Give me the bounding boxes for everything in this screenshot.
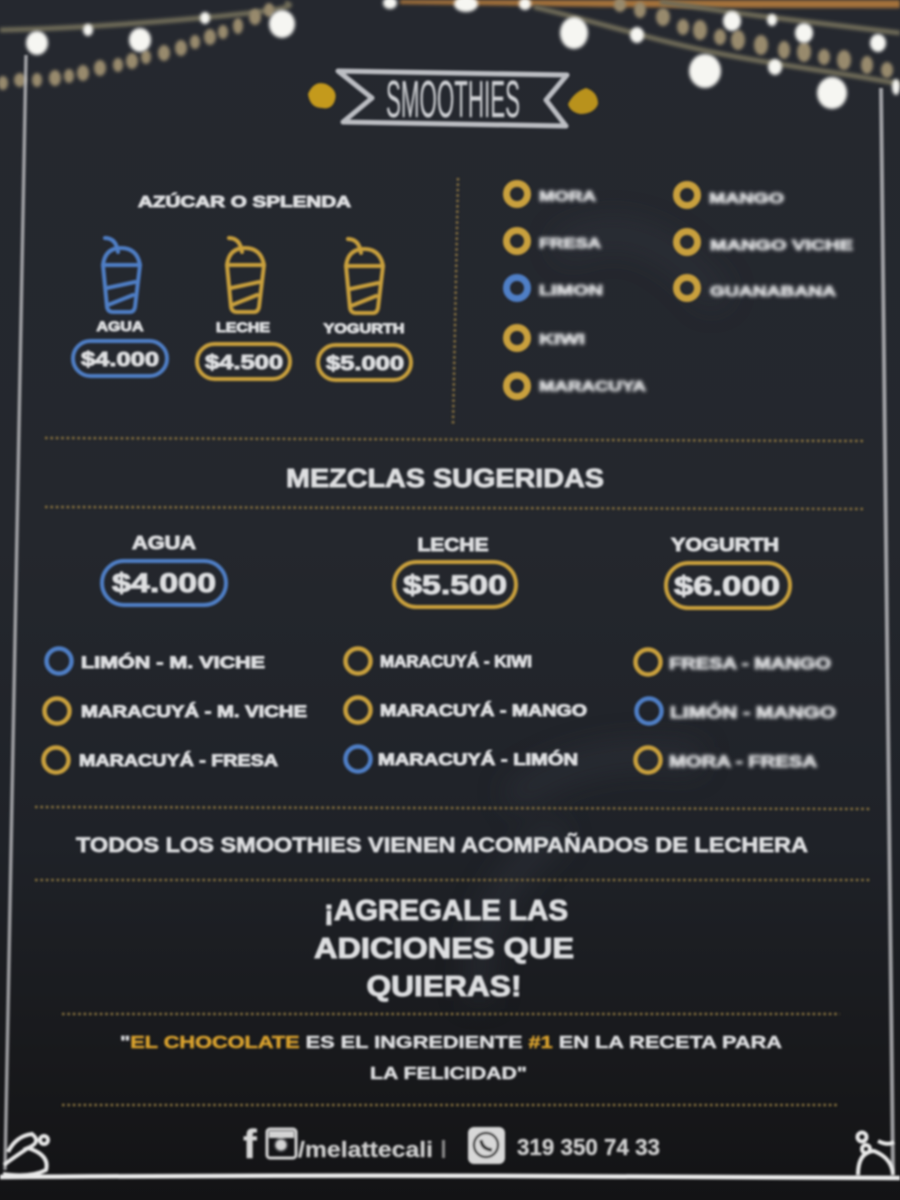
flavor: guanabana bbox=[676, 278, 836, 300]
icon: instagram bbox=[267, 1129, 296, 1158]
faint background swoosh bbox=[479, 233, 720, 1000]
price: leche bbox=[394, 562, 516, 607]
flavor: maracuya: MARACUYA bbox=[539, 378, 646, 395]
flavor: kiwi: KIWI bbox=[539, 331, 585, 348]
white bulbs bbox=[26, 0, 900, 109]
flavor: limon bbox=[506, 278, 603, 299]
label: leche: LECHE bbox=[216, 319, 270, 335]
mix: limon mango: LIMÓN - MANGO bbox=[670, 703, 836, 722]
title banner: SMOOTHIES bbox=[386, 71, 520, 129]
label: yogurth: YOGURTH bbox=[324, 320, 404, 336]
mix: limon mango bbox=[636, 698, 836, 724]
icon: blue cup bbox=[103, 238, 140, 312]
heading: adiciones bbox=[314, 895, 574, 1003]
mix: maracuya mango bbox=[346, 698, 587, 722]
flavor: mango viche bbox=[676, 232, 853, 254]
mix: maracuya fresa bbox=[44, 748, 278, 772]
phone number: 319 350 74 33 bbox=[517, 1134, 660, 1160]
mix: maracuya fresa: MARACUYÁ - FRESA bbox=[79, 751, 278, 770]
mix: maracuya kiwi: MARACUYÁ - KIWI bbox=[380, 652, 532, 671]
mix list bbox=[44, 648, 836, 772]
flavor: guanabana: GUANABANA bbox=[710, 283, 836, 300]
mix: limon m. viche bbox=[46, 648, 265, 674]
mezclas prices bbox=[102, 533, 790, 608]
price: leche: $5.500 bbox=[403, 570, 507, 600]
footer bbox=[243, 1121, 660, 1167]
icon: yogurth cup bbox=[346, 239, 383, 313]
mix: maracuya m. viche: MARACUYÁ - M. VICHE bbox=[81, 702, 307, 721]
mix: maracuya m. viche bbox=[44, 698, 307, 724]
flavor: fresa: FRESA bbox=[539, 235, 601, 252]
quote: LA FELICIDAD" bbox=[370, 1063, 527, 1083]
price: yogurth: $5.000 bbox=[326, 353, 404, 375]
mix: fresa mango: FRESA - MANGO bbox=[669, 655, 831, 673]
mix: maracuya mango: MARACUYÁ - MANGO bbox=[380, 701, 587, 720]
mix: maracuya limon: MARACUYÁ - LIMÓN bbox=[378, 750, 578, 769]
section: base prices bbox=[73, 192, 411, 380]
flavor: limon: LIMON bbox=[539, 282, 603, 299]
string lights bbox=[0, 0, 900, 109]
ribbon bbox=[338, 71, 567, 126]
price: agua: $4.000 bbox=[81, 349, 159, 371]
mix: maracuya kiwi bbox=[346, 648, 532, 674]
note: lechera: TODOS LOS SMOOTHIES VIENEN ACOMPAÑADOS DE LECHERA bbox=[76, 834, 808, 857]
quote bbox=[120, 1032, 782, 1083]
flavors list bbox=[506, 184, 853, 396]
label: yogurth: YOGURTH bbox=[671, 535, 779, 555]
flavor: maracuya bbox=[506, 376, 646, 396]
price: yogurth bbox=[318, 345, 411, 380]
label: agua: AGUA bbox=[132, 533, 196, 553]
icon: whatsapp bbox=[468, 1127, 505, 1164]
icon: facebook: f bbox=[243, 1121, 257, 1167]
icon: left gold lips bbox=[308, 83, 336, 108]
icon: leche cup bbox=[227, 238, 264, 312]
price: leche bbox=[197, 344, 290, 379]
subtitle: AZÚCAR O SPLENDA bbox=[138, 192, 352, 211]
mix: mora fresa bbox=[636, 748, 817, 772]
top edge wood bbox=[400, 0, 900, 8]
flavor: mora: MORA bbox=[539, 188, 596, 205]
flourish: bottom left bbox=[3, 1134, 48, 1175]
flavor: mango: MANGO bbox=[709, 190, 784, 207]
flavor: mango bbox=[676, 184, 784, 207]
price: yogurth: $6.000 bbox=[674, 571, 780, 601]
price: leche: $4.500 bbox=[205, 352, 283, 374]
heading: mezclas sugeridas: MEZCLAS SUGERIDAS bbox=[286, 463, 604, 493]
title banner bbox=[338, 71, 567, 129]
heading: adiciones: ¡AGREGALE LAS bbox=[324, 895, 568, 927]
mix: maracuya limon bbox=[346, 746, 578, 772]
price: agua: $4.000 bbox=[112, 568, 216, 598]
right bead strand bbox=[614, 0, 893, 78]
flavor: mora bbox=[506, 184, 596, 205]
flourish: bottom right bbox=[858, 1132, 894, 1175]
price: agua bbox=[73, 341, 167, 376]
label: leche: LECHE bbox=[418, 535, 488, 555]
price: agua bbox=[102, 561, 226, 605]
left bead strand bbox=[0, 3, 274, 90]
mix: limon m. viche: LIMÓN - M. VICHE bbox=[81, 653, 265, 672]
flavor: mango viche: MANGO VICHE bbox=[710, 237, 853, 254]
mix: fresa mango bbox=[636, 650, 831, 674]
flavor: kiwi bbox=[506, 328, 585, 348]
heading: adiciones: QUIERAS! bbox=[366, 971, 522, 1003]
price: yogurth bbox=[666, 563, 790, 608]
separator bbox=[442, 1140, 445, 1158]
social handle: /melattecali bbox=[298, 1137, 433, 1162]
quote: "EL CHOCOLATE ES EL INGREDIENTE #1 EN LA RECETA PARA bbox=[120, 1032, 782, 1052]
flavor: fresa bbox=[506, 230, 601, 252]
heading: adiciones: ADICIONES QUE bbox=[314, 933, 574, 965]
mix: mora fresa: MORA - FRESA bbox=[669, 753, 817, 771]
label: agua: AGUA bbox=[96, 318, 144, 334]
icon: right gold lips bbox=[568, 88, 598, 114]
light ropes bbox=[0, 2, 900, 84]
